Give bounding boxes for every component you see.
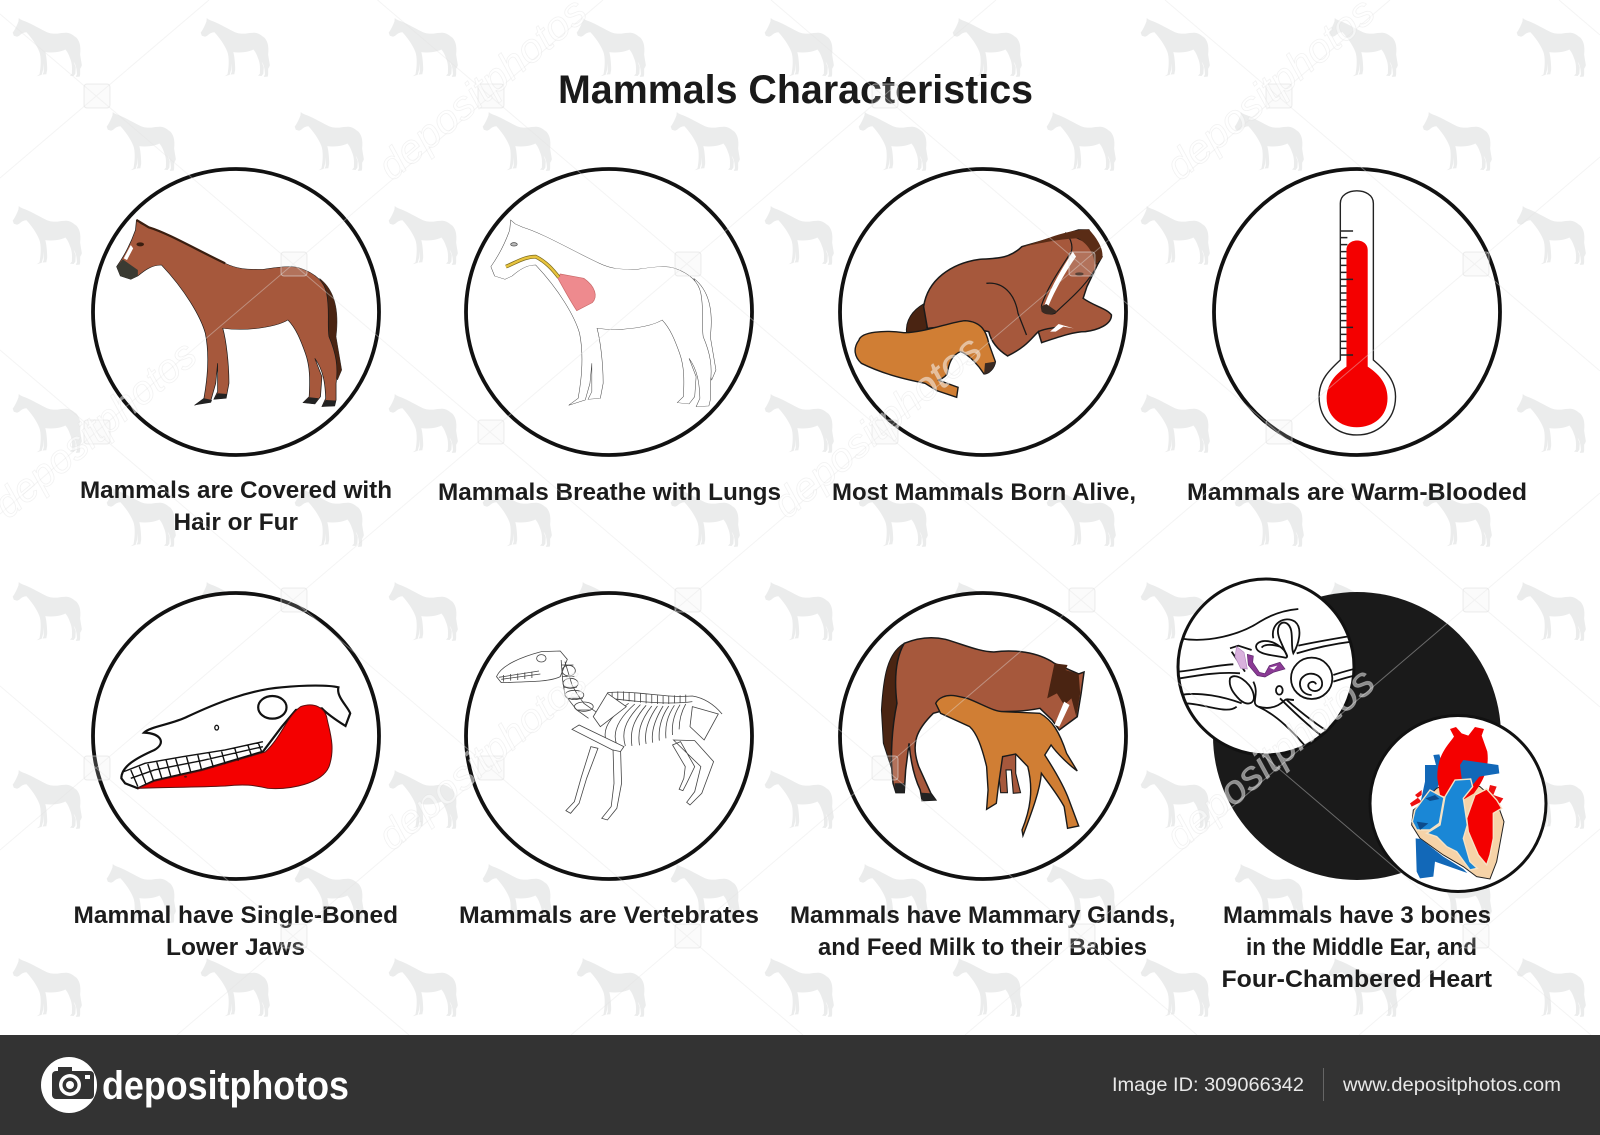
panel: born alive (840, 169, 1126, 455)
website: www.depositphotos.com (1342, 1075, 1561, 1096)
watermark text: depositphotos (1158, 0, 1383, 189)
icon: camera logo (41, 1057, 97, 1113)
caption: vertebrates: Mammals are Vertebrates (459, 902, 759, 929)
caption: mammary glands (790, 902, 1176, 961)
footer bar (0, 1035, 1600, 1135)
icon: brown horse (117, 220, 342, 407)
icon: skull with red jaw (121, 686, 350, 789)
icon: thermometer (1319, 191, 1396, 435)
panel: mammary glands (840, 593, 1126, 879)
caption: single-boned jaw: Lower Jaws (166, 934, 305, 961)
panel: hair or fur (93, 169, 379, 455)
caption: hair or fur: Hair or Fur (174, 509, 298, 536)
caption: ear and heart: Mammals have 3 bones (1223, 902, 1491, 929)
caption: lungs: Mammals Breathe with Lungs (438, 479, 781, 506)
watermark camera marks (84, 84, 1489, 948)
caption: hair or fur (80, 477, 392, 536)
caption: mammary glands: Mammals have Mammary Glands, (790, 902, 1176, 929)
watermark text: depositphotos (765, 327, 990, 527)
caption: ear and heart: Four-Chambered Heart (1222, 966, 1492, 993)
caption: mammary glands: and Feed Milk to their Babies (818, 934, 1147, 961)
icon: mare and newborn foal (855, 229, 1111, 397)
panel: lungs (466, 169, 752, 455)
icon: horse skeleton (497, 651, 722, 820)
icon: inner ear inset (1178, 579, 1357, 755)
watermark text: depositphotos (370, 659, 595, 859)
image id: Image ID: 309066342 (1112, 1075, 1304, 1096)
icon: white horse with lungs (491, 220, 716, 407)
watermark text: depositphotos (370, 0, 595, 189)
caption: born alive: Most Mammals Born Alive, (832, 479, 1136, 506)
caption: warm-blooded: Mammals are Warm-Blooded (1187, 479, 1527, 506)
icon: mare feeding foal (881, 638, 1084, 836)
caption: ear and heart: in the Middle Ear, and (1246, 934, 1477, 961)
caption: single-boned jaw: Mammal have Single-Boned (74, 902, 398, 929)
caption: ear and heart (1222, 902, 1492, 993)
icon: heart inset (1370, 716, 1546, 892)
panel: single-boned lower jaw (93, 593, 379, 879)
watermark text (0, 0, 1383, 859)
black backing circle (1213, 592, 1501, 880)
caption: single-boned jaw (74, 902, 398, 961)
title: Mammals Characteristics (558, 68, 1033, 112)
logo wordmark: depositphotos (102, 1064, 349, 1108)
panel: vertebrates (466, 593, 752, 879)
caption: hair or fur: Mammals are Covered with (80, 477, 392, 504)
panel: middle ear and heart (1178, 579, 1546, 892)
watermark text: depositphotos (1158, 659, 1383, 859)
panel: warm-blooded (1214, 169, 1500, 455)
